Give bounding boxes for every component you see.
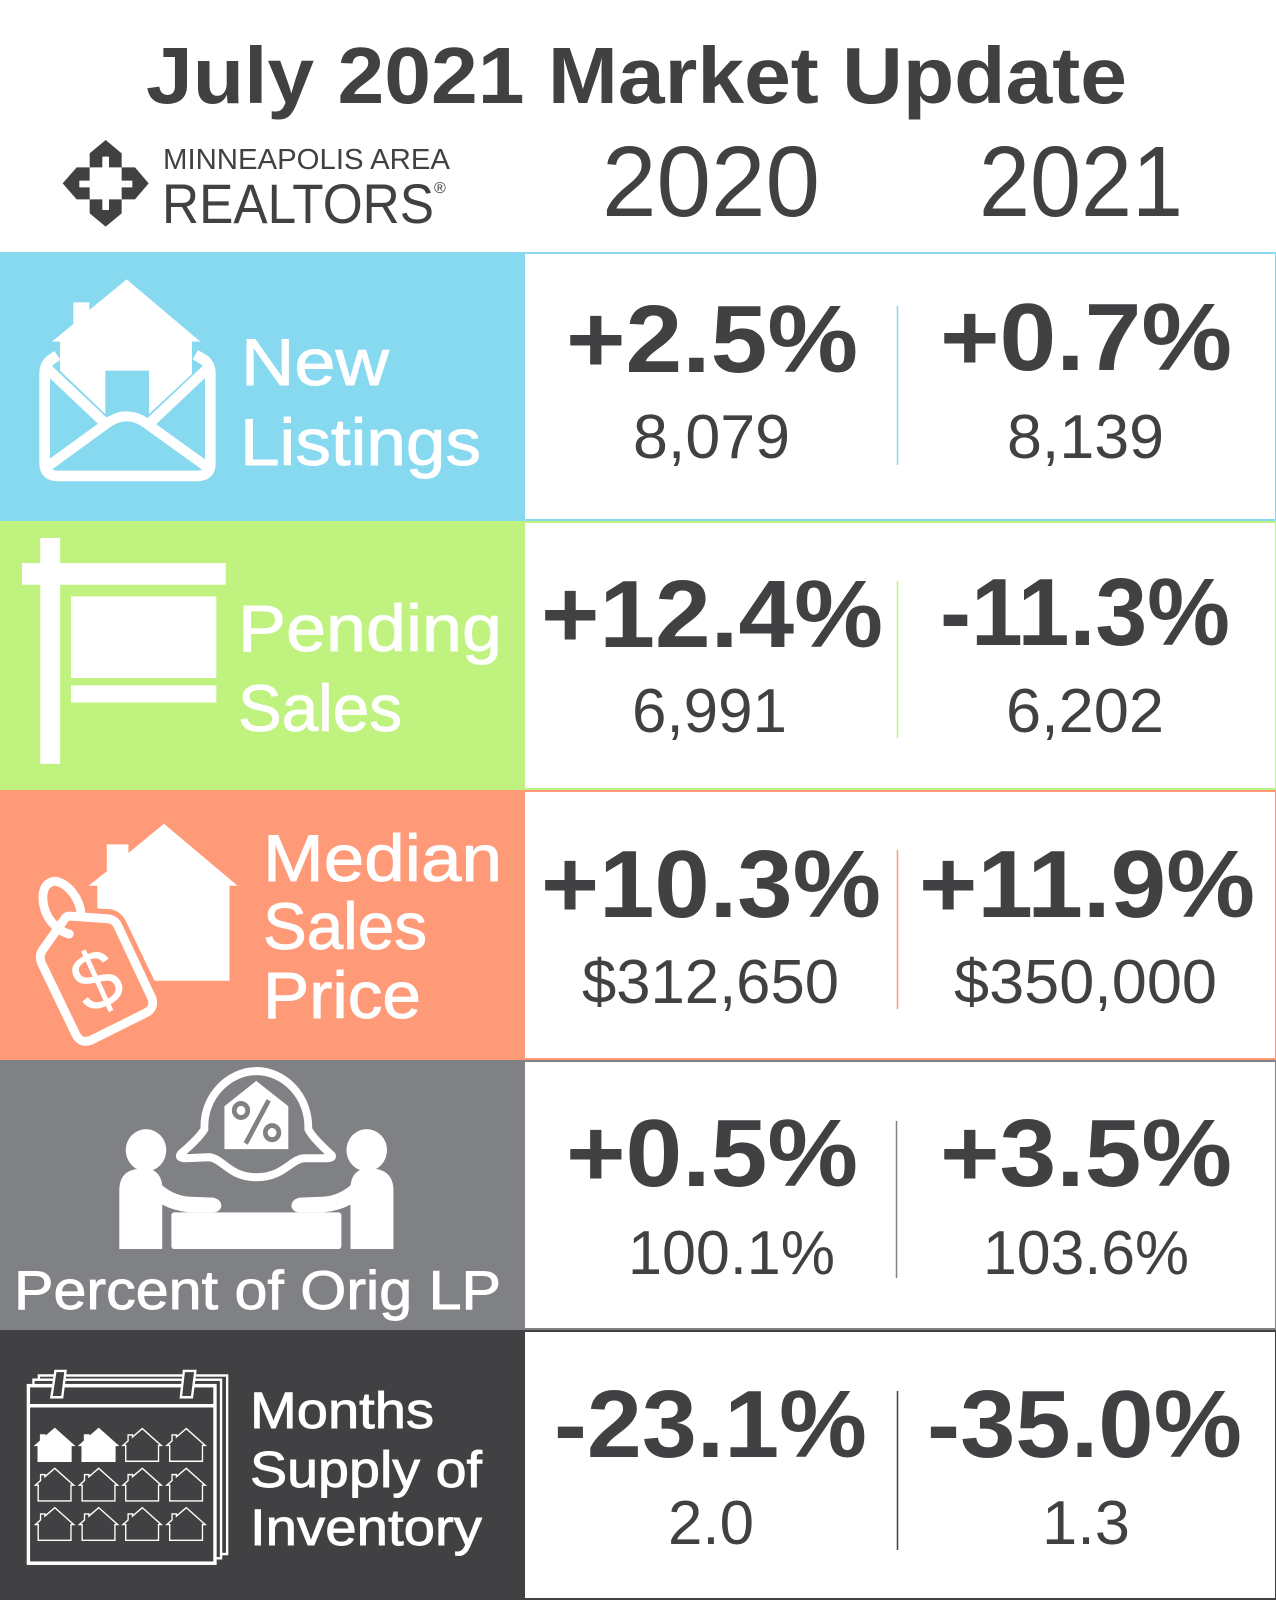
column heading: 2021: 2021 [979, 126, 1183, 238]
label: new listings: Listings [240, 405, 481, 479]
stat: 2021 percent of orig lp: +3.5% [940, 1100, 1232, 1207]
label: new listings [240, 325, 481, 479]
label: months supply of inventory: Supply of [250, 1441, 483, 1498]
panel: median sales price [0, 790, 1276, 1060]
stat: 2021 percent of orig lp: 103.6% [983, 1219, 1189, 1288]
label: median sales price [263, 821, 502, 1032]
label: pending sales [238, 591, 502, 745]
stat: 2021 pending sales: -11.3% [940, 559, 1230, 666]
stat: 2021 median sales price [919, 831, 1255, 1017]
stat: 2021 median sales price: $350,000 [954, 948, 1217, 1017]
icon: house with price tag: $ [57, 930, 136, 1032]
panel: new listings [0, 252, 1276, 521]
stat: 2020 new listings: 8,079 [633, 403, 790, 472]
title: July 2021 Market Update [146, 31, 1127, 120]
icon: real estate sign [22, 538, 226, 764]
stat: 2020 months supply [554, 1371, 867, 1558]
label: median sales price: Price [263, 958, 421, 1032]
stat: 2021 median sales price: +11.9% [919, 831, 1255, 938]
panel: months supply of inventory [0, 1330, 1276, 1600]
stat: 2020 new listings: +2.5% [566, 286, 858, 393]
stat: 2020 pending sales [541, 561, 883, 746]
label: months supply of inventory: Inventory [250, 1499, 483, 1556]
label: new listings: New [241, 325, 389, 399]
logo: Minneapolis Area Realtors [63, 140, 451, 235]
stat: 2020 new listings [566, 286, 858, 472]
stat: 2020 pending sales: 6,991 [632, 677, 787, 746]
label: months supply of inventory [250, 1382, 483, 1556]
stat: 2020 median sales price: $312,650 [582, 948, 839, 1017]
logo text: registered mark: ® [434, 180, 446, 197]
label: median sales price: Median [263, 821, 502, 895]
stat: 2021 months supply: -35.0% [927, 1371, 1242, 1478]
icon: two people at table with percent bubble [119, 1071, 393, 1249]
stat: 2020 percent of orig lp [566, 1100, 858, 1288]
panel: percent of original list price [0, 1060, 1276, 1330]
stat: 2021 pending sales [940, 559, 1230, 746]
stat: 2020 median sales price: +10.3% [541, 831, 881, 938]
stat: 2021 new listings [940, 284, 1232, 472]
label: pending sales: Pending [238, 591, 502, 665]
stat: 2021 pending sales: 6,202 [1006, 677, 1164, 746]
column heading: 2020: 2020 [602, 126, 820, 238]
stat: 2020 months supply: 2.0 [668, 1489, 754, 1558]
logo text: Minneapolis Area: MINNEAPOLIS AREA [163, 144, 451, 176]
stat: 2021 percent of orig lp [940, 1100, 1232, 1288]
panel: pending sales [0, 521, 1276, 790]
icon: house with price tag [40, 824, 238, 1041]
stat: 2020 percent of orig lp: +0.5% [566, 1100, 858, 1207]
stat: 2021 new listings: +0.7% [940, 284, 1232, 391]
icon: calendar of houses [28, 1371, 227, 1563]
label: percent of orig lp: Percent of Orig LP [14, 1259, 501, 1321]
stat: 2021 months supply: 1.3 [1042, 1489, 1130, 1558]
stat: 2021 new listings: 8,139 [1007, 403, 1164, 472]
stat: 2020 months supply: -23.1% [554, 1371, 867, 1478]
stat: 2020 percent of orig lp: 100.1% [628, 1219, 835, 1288]
stat: 2021 months supply [927, 1371, 1242, 1558]
label: months supply of inventory: Months [250, 1382, 434, 1439]
icon: logo cross [63, 140, 149, 227]
stat: 2020 median sales price [541, 831, 881, 1017]
logo text: Realtors: REALTORS [162, 172, 434, 235]
stat: 2020 pending sales: +12.4% [541, 561, 883, 668]
label: pending sales: Sales [238, 671, 402, 745]
icon: house in envelope [45, 279, 210, 476]
label: median sales price: Sales [263, 889, 427, 963]
